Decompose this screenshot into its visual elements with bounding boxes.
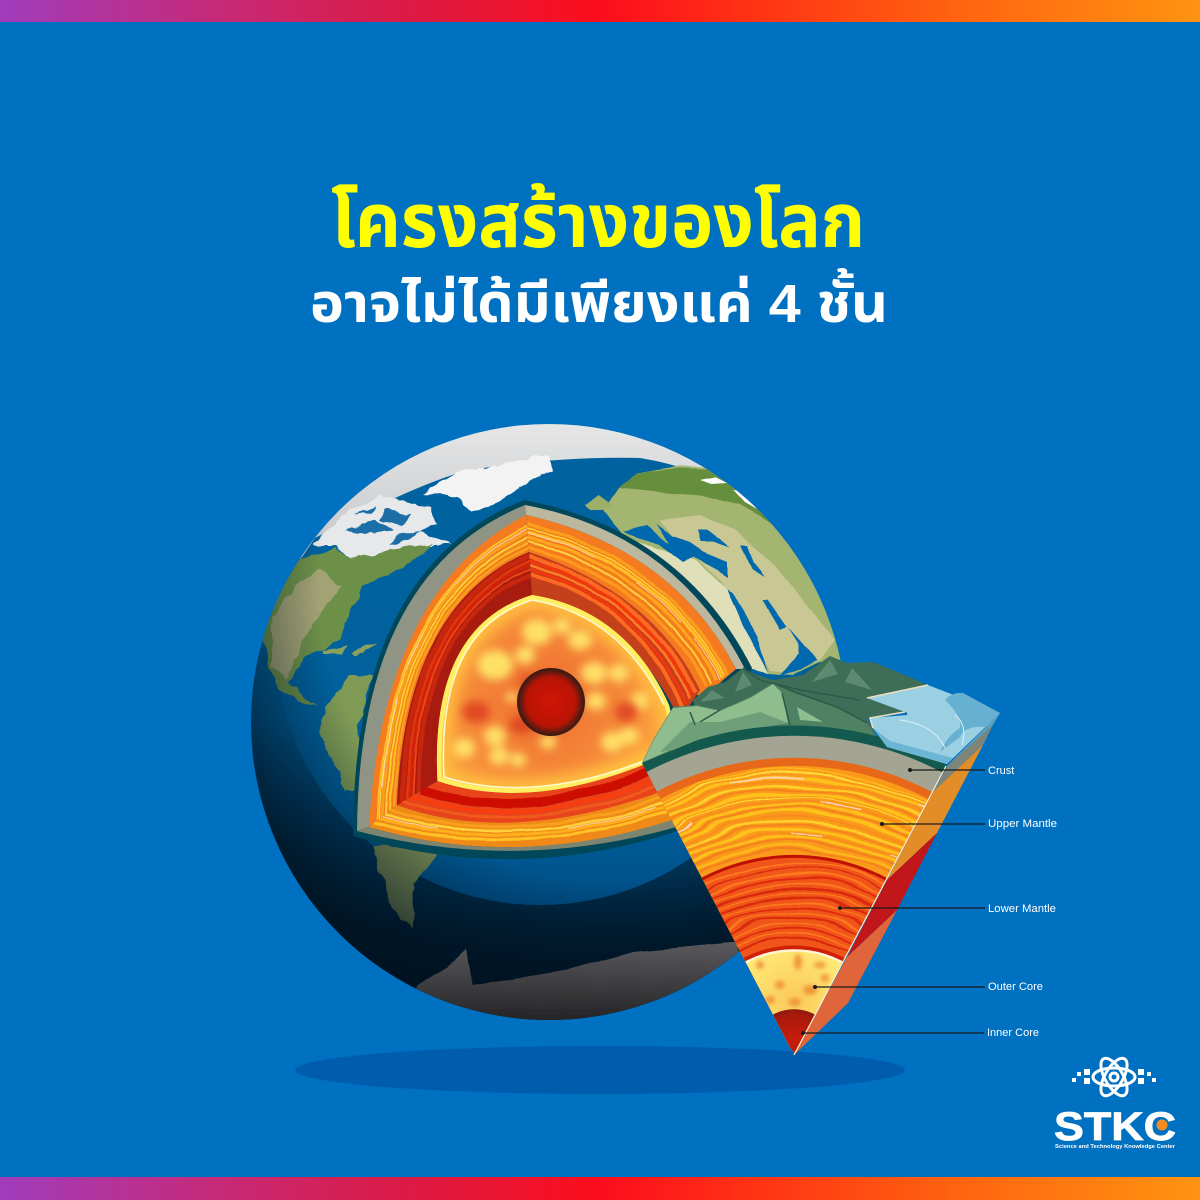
slice front face: [606, 726, 982, 1053]
water surface: [867, 685, 1000, 764]
water side face: [948, 713, 1000, 765]
lower mantle: [681, 856, 907, 1053]
crust right face: [525, 505, 745, 669]
label: inner core: [801, 1027, 1039, 1039]
lit mountain faces: [643, 684, 788, 762]
red sea: [727, 588, 768, 672]
ice regions: [313, 455, 553, 558]
lit ocean area: [292, 710, 691, 905]
outer core flames: [756, 954, 829, 1006]
globe lighting: [251, 536, 740, 1020]
upper mantle side: [887, 745, 983, 880]
earth globe: [251, 424, 840, 1020]
water highlights: [900, 715, 964, 748]
americas land: [262, 543, 439, 930]
map layers: [251, 424, 840, 1020]
core inner glow: [437, 595, 682, 793]
crust layer: [612, 736, 976, 1053]
arctic ice cap: [300, 424, 736, 558]
land mass: [603, 466, 840, 675]
red patches: [462, 675, 637, 734]
outer core face: [425, 590, 690, 815]
core yellow rim: [437, 595, 682, 793]
desert interior: [660, 515, 835, 672]
inner core wedge: [769, 1009, 819, 1053]
ocean: [251, 424, 847, 1020]
lit ridge patch: [797, 707, 823, 722]
south america lower: [374, 843, 439, 930]
canadian arctic: [313, 495, 450, 558]
arctic channels: [345, 505, 420, 545]
label: lower mantle: [838, 903, 1056, 915]
outer core wedge: [735, 950, 853, 1053]
right face lower mantle: [529, 552, 700, 707]
mediterranean: [623, 523, 727, 577]
right lower mantle streaks: [529, 556, 695, 708]
labels: [801, 765, 1057, 1039]
mountain mid tones: [660, 712, 788, 752]
label: lower mantle: Lower Mantle: [988, 903, 1056, 915]
label: upper mantle: Upper Mantle: [988, 818, 1057, 830]
upper mantle body: [629, 766, 959, 1053]
right upper mantle streaks: [527, 524, 727, 686]
crust left face: [357, 505, 526, 831]
black sea: [697, 530, 730, 548]
logo tagline: Science and Technology Knowledge Center: [1055, 1144, 1175, 1150]
label: inner core: Inner Core: [987, 1027, 1039, 1039]
label: crust: Crust: [988, 765, 1014, 777]
logo: STKC: [1054, 1054, 1176, 1150]
left face upper mantle: [369, 515, 529, 827]
back mountains: [693, 656, 928, 735]
bottom gradient bar: [0, 1177, 1200, 1200]
northern forest: [619, 468, 772, 524]
ground shadow: [295, 1046, 905, 1094]
left lower mantle streaks: [402, 556, 530, 802]
cutaway section of earth: [353, 500, 752, 875]
bottom lower mantle streaks: [400, 772, 660, 817]
water dark current: [940, 693, 1000, 752]
shoreline sand: [867, 685, 928, 728]
core-mantle boundary red: [732, 945, 856, 1053]
caribbean islands: [323, 645, 375, 656]
upper mantle: [625, 758, 963, 1053]
mountain ridge lines: [690, 668, 867, 725]
bottom upper mantle streaks: [372, 797, 672, 839]
mantle boundary: [681, 856, 907, 892]
top gradient bar: [0, 0, 1200, 22]
logo orange dot: [1156, 1120, 1168, 1130]
bottom face lower mantle: [390, 760, 670, 830]
title: [310, 179, 888, 334]
indian ocean: [780, 627, 817, 675]
eurasia and africa: [585, 466, 870, 675]
title line 1: โครงสร้างของโลก: [331, 179, 865, 264]
earth slice wedge: [606, 656, 1000, 1055]
slice right edge highlight: [794, 766, 946, 1055]
uk islands: [585, 495, 609, 510]
core side: [794, 910, 897, 1055]
logo atom icon: [1093, 1054, 1135, 1100]
front mountains: [642, 683, 877, 763]
terrain base band: [606, 726, 982, 1053]
back mountain highlights: [700, 660, 872, 702]
crust side: [933, 725, 993, 792]
north america: [262, 543, 433, 707]
label: outer core: Outer Core: [988, 981, 1043, 993]
south america upper: [320, 675, 373, 790]
core white line: [443, 600, 664, 788]
title line 2: อาจไม่ได้มีเพียงแค่ 4 ชั้น: [310, 268, 888, 334]
wedge dark outline: [353, 500, 752, 859]
lower mantle side: [847, 833, 937, 957]
magma blobs: [453, 618, 649, 767]
caspian sea: [740, 545, 765, 577]
left upper mantle streaks: [377, 526, 529, 820]
lower mantle streaks: [685, 863, 903, 959]
north africa: [630, 540, 768, 673]
crust bottom face: [357, 819, 680, 851]
inner core sphere: [517, 668, 585, 736]
logo wordmark: STKC: [1054, 1105, 1176, 1149]
bottom face upper mantle: [369, 792, 672, 848]
antarctica: [416, 942, 739, 1020]
label: outer core: [813, 981, 1043, 993]
label: upper mantle: [880, 818, 1057, 830]
north america interior: [272, 570, 340, 680]
arctic coast ice: [700, 477, 757, 510]
upper mantle streaks: [633, 770, 955, 886]
left face lower mantle: [397, 552, 532, 805]
label: crust: [908, 765, 1014, 777]
slice side face: [794, 725, 993, 1055]
greenland: [422, 455, 553, 513]
logo pixel dots: [1072, 1069, 1156, 1084]
persian gulf: [763, 600, 787, 630]
water front edge: [873, 728, 953, 764]
outer core rim: [735, 950, 853, 969]
right face upper mantle: [526, 515, 736, 696]
